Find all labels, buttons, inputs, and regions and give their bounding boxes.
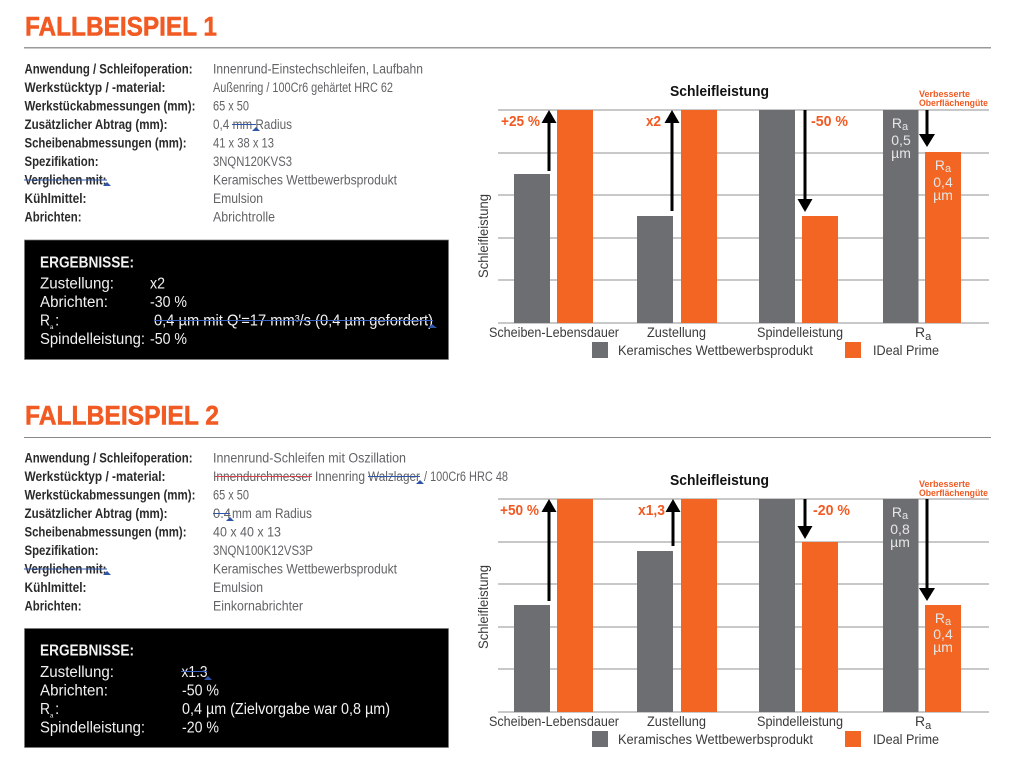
specification values: 40 x 40 x 13 — [213, 524, 281, 540]
category labels — [489, 713, 932, 732]
specification values: 65 x 50 — [213, 98, 249, 114]
change labels: x2 — [646, 113, 661, 130]
specification labels: Zusätzlicher Abtrag (mm): — [24, 117, 168, 132]
results box: -30 % — [150, 294, 187, 311]
specification values: Emulsion — [213, 580, 263, 595]
results box: Spindelleistung: — [40, 720, 145, 736]
Ra values: a — [902, 510, 909, 522]
bars — [514, 499, 961, 712]
category labels: Spindelleistung — [757, 713, 843, 729]
results box: : — [55, 312, 59, 330]
arrows — [542, 499, 935, 601]
arrows — [542, 110, 935, 212]
results box: -20 % — [182, 720, 219, 736]
Ra values: 0,8 — [890, 521, 910, 537]
category labels: R — [915, 324, 925, 340]
category labels: Zustellung — [647, 713, 706, 729]
Ra values — [890, 504, 953, 655]
specification labels: Verglichen mit: — [24, 172, 106, 188]
results box: Zustellung: — [40, 276, 114, 292]
specification values: 0,4 mm Radius — [213, 117, 292, 132]
results box: R — [40, 312, 50, 330]
Ra values: µm — [890, 534, 910, 550]
legend: IDeal Prime — [873, 731, 939, 747]
Ra values: 0,5 — [891, 132, 911, 148]
results box: Abrichten: — [40, 294, 108, 311]
results box: a — [50, 325, 54, 331]
change labels: Oberflächengüte — [919, 98, 988, 108]
category labels: a — [925, 720, 932, 732]
specification values: mm am Radius — [232, 506, 312, 521]
results box: 0,4 µm (Zielvorgabe war 0,8 µm) — [182, 701, 390, 718]
specification values: Walzlager — [368, 469, 420, 484]
change labels: -50 % — [811, 113, 848, 130]
results box: -50 % — [150, 331, 187, 348]
specification labels: Spezifikation: — [24, 154, 98, 169]
specification labels: Scheibenabmessungen (mm): — [24, 136, 186, 150]
results box: ERGEBNISSE: — [40, 642, 134, 660]
specification labels: Verglichen mit: — [24, 562, 106, 576]
results box: ERGEBNISSE: — [40, 254, 134, 272]
Ra values: a — [902, 121, 909, 133]
results box — [24, 628, 448, 748]
change labels: +25 % — [501, 113, 540, 130]
specification values: 0.4 — [213, 506, 231, 521]
specification labels: Kühlmittel: — [24, 191, 86, 206]
specification values: Abrichtrolle — [213, 210, 275, 224]
specification values: 65 x 50 — [213, 488, 249, 502]
results box: Spindelleistung: — [40, 331, 145, 348]
change labels: -20 % — [813, 502, 850, 519]
specification values: Innenring — [315, 469, 365, 484]
bar chart: grinding performance 2 — [475, 473, 989, 747]
results box: a — [50, 714, 54, 720]
panel: case study 1 — [24, 12, 991, 360]
specification labels: Werkstückabmessungen (mm): — [24, 488, 196, 502]
specification values: Keramisches Wettbewerbsprodukt — [213, 562, 397, 576]
specification values: 41 x 38 x 13 — [213, 136, 274, 150]
category labels — [489, 324, 932, 343]
specification values: Emulsion — [213, 191, 263, 206]
specification values: Keramisches Wettbewerbsprodukt — [213, 172, 397, 188]
specification labels: Anwendung / Schleifoperation: — [24, 450, 192, 466]
results box: Zustellung: — [40, 664, 114, 681]
legend: Keramisches Wettbewerbsprodukt — [618, 342, 813, 358]
results box — [24, 240, 448, 360]
specification labels: Abrichten: — [24, 598, 82, 614]
specification labels: Werkstücktyp / -material: — [24, 80, 166, 95]
category labels: R — [915, 713, 925, 729]
specification labels — [24, 62, 196, 224]
Ra values: 0,4 — [933, 626, 953, 642]
results box: : — [55, 701, 59, 718]
Ra values: a — [945, 163, 952, 175]
change labels — [501, 89, 988, 130]
specification labels: Kühlmittel: — [24, 580, 86, 595]
specification values: 3NQN120KVS3 — [213, 154, 292, 169]
specification labels: Zusätzlicher Abtrag (mm): — [24, 506, 168, 521]
legend: IDeal Prime — [873, 342, 939, 358]
Ra values: a — [945, 616, 952, 628]
specification values — [213, 450, 508, 614]
category labels: Spindelleistung — [757, 324, 843, 340]
bar chart: grinding performance 1 — [475, 84, 989, 358]
chart title: Schleifleistung — [670, 473, 769, 489]
Ra values: µm — [891, 145, 911, 161]
results box: x1.3 — [182, 664, 208, 681]
Ra values: µm — [933, 187, 953, 203]
bars — [514, 110, 961, 323]
legend: Keramisches Wettbewerbsprodukt — [618, 731, 813, 747]
change labels: Verbesserte — [919, 479, 970, 489]
change labels: Oberflächengüte — [919, 488, 988, 498]
specification labels: Abrichten: — [24, 210, 82, 224]
specification labels: Scheibenabmessungen (mm): — [24, 524, 186, 540]
specification labels: Spezifikation: — [24, 543, 98, 558]
category labels: Zustellung — [647, 324, 706, 340]
specification values: Innenrund-Schleifen mit Oszillation — [213, 450, 406, 466]
title: case study 2: FALLBEISPIEL 2 — [25, 400, 219, 430]
specification values: Innenrund-Einstechschleifen, Laufbahn — [213, 62, 423, 76]
category labels: a — [925, 331, 932, 343]
category labels: Scheiben-Lebensdauer — [489, 324, 619, 340]
results box: Abrichten: — [40, 682, 108, 700]
specification labels — [24, 450, 196, 614]
category labels: Scheiben-Lebensdauer — [489, 713, 619, 729]
specification values: Einkornabrichter — [213, 598, 303, 614]
panel: case study 2 — [24, 400, 991, 748]
specification values — [213, 62, 423, 224]
specification values: Innendurchmesser — [213, 469, 312, 484]
results box: -50 % — [182, 682, 219, 700]
change labels: +50 % — [500, 502, 539, 519]
change labels: Verbesserte — [919, 89, 970, 99]
specification values: / 100Cr6 HRC 48 — [424, 469, 508, 484]
Ra values: R — [892, 115, 902, 131]
results box: R — [40, 701, 50, 718]
legend — [592, 731, 939, 747]
Ra values: 0,4 — [933, 174, 953, 190]
results box: x2 — [150, 276, 165, 292]
legend — [592, 342, 939, 358]
title: case study 1: FALLBEISPIEL 1 — [25, 12, 217, 42]
Ra values: R — [935, 157, 945, 173]
Ra values — [891, 115, 953, 203]
chart title: Schleifleistung — [670, 84, 769, 100]
specification values: 3NQN100K12VS3P — [213, 543, 313, 558]
Ra values: µm — [933, 639, 953, 655]
Ra values: R — [935, 610, 945, 626]
specification labels: Anwendung / Schleifoperation: — [24, 62, 192, 76]
change labels: x1,3 — [638, 502, 665, 519]
Ra values: R — [892, 504, 902, 520]
specification values: Außenring / 100Cr6 gehärtet HRC 62 — [213, 80, 393, 95]
change labels — [500, 479, 988, 519]
axis label: Schleifleistung — [475, 194, 491, 278]
results box: 0,4 µm mit Q'=17 mm³/s (0,4 µm gefordert) — [154, 312, 433, 330]
axis label: Schleifleistung — [475, 565, 491, 649]
specification labels: Werkstücktyp / -material: — [24, 469, 166, 484]
specification labels: Werkstückabmessungen (mm): — [24, 98, 196, 114]
